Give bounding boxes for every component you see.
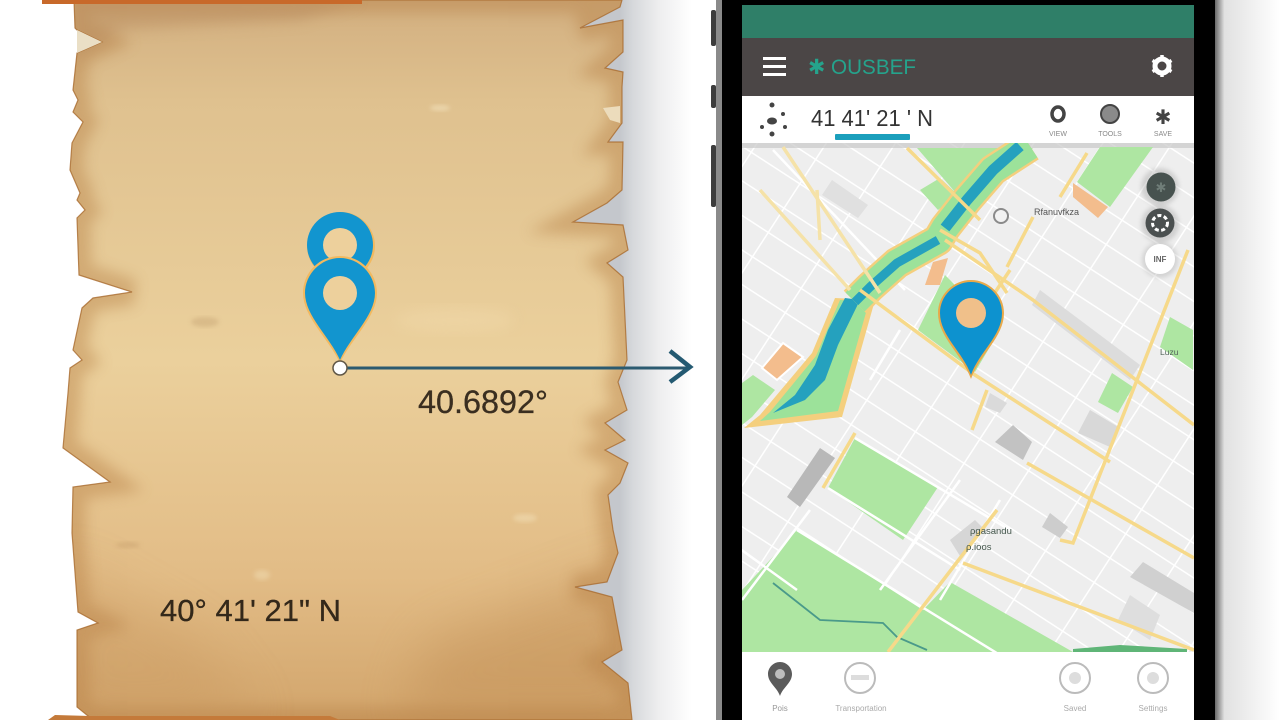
map: river with banks: [744, 146, 1030, 428]
nav item: settings: [1138, 663, 1168, 713]
right side shadow: [1222, 0, 1280, 720]
screen: app header: [742, 38, 1194, 96]
map: grey building blocks: [787, 180, 1194, 640]
map: yellow roads: [760, 147, 1194, 652]
map: place label centre: ρgasandu: [970, 526, 1012, 537]
map: white street overlay: [742, 150, 1010, 652]
coordinate label: decimal: 40.6892°: [418, 384, 548, 420]
panel: smartphone: [700, 0, 1224, 720]
icon: rear location pin: [307, 212, 375, 280]
nav item: location: [768, 662, 792, 713]
map control: info button: INF: [1154, 255, 1167, 264]
map: orange plots: [762, 183, 1108, 380]
icon: ring tool: VIEW: [1049, 131, 1067, 138]
icon: compass cluster: [760, 102, 787, 136]
nav item: saved: Saved: [1064, 704, 1086, 713]
active tab underline: [835, 134, 910, 140]
left tear patch: [77, 30, 102, 53]
screen: bottom navigation: [742, 652, 1194, 720]
icon: star tool: [1154, 107, 1172, 138]
map: place label centre second line: ρ.ioos: [966, 542, 992, 553]
coordinate label: DMS: 40° 41' 21" N: [160, 593, 341, 628]
arrow: parchment to phone: [333, 351, 690, 382]
app logo: ✱ OUSBEF: [808, 56, 916, 79]
icon: settings gear: [1152, 55, 1172, 77]
icon: disc tool: TOOLS: [1098, 131, 1122, 138]
map control: layers button: ✱: [1156, 180, 1167, 195]
map control: layers button: [1141, 168, 1179, 206]
map: dark green strip: [1073, 645, 1187, 652]
river upper channel: [855, 146, 1030, 302]
map: place label east: Luzu: [1160, 347, 1179, 357]
nav item: routes: Transportation: [835, 704, 887, 713]
nav item: location: Pois: [772, 704, 788, 713]
icon: disc tool: [1098, 105, 1122, 138]
map: place label north: Rfanuvfkza: [1034, 207, 1079, 217]
coordinates readout: 41 41' 21 ' N: [811, 105, 933, 131]
phone side buttons: [711, 10, 716, 207]
icon: map location pin: [938, 280, 1004, 379]
map: parks: [742, 147, 1193, 652]
icon: front location pin: [303, 256, 377, 363]
screen: status bar: [742, 5, 1194, 38]
map control: recentre button: [1141, 205, 1179, 243]
phone body: [716, 0, 1224, 720]
chart: street map: [742, 143, 1194, 652]
nav item: routes: [835, 663, 887, 713]
map: stream: [773, 583, 927, 650]
icon: star tool: ✱: [1155, 107, 1171, 129]
parchment sheet: [60, 0, 640, 720]
panel: torn parchment: [42, 0, 640, 720]
top torn strip: [42, 0, 362, 4]
icon: map landmark ring: [994, 209, 1008, 223]
icon: ring tool: [1049, 107, 1067, 138]
nav item: saved: [1060, 663, 1090, 713]
background shadow behind parchment: [560, 0, 692, 720]
icon: star tool: SAVE: [1154, 131, 1172, 138]
nav item: settings: Settings: [1139, 704, 1167, 713]
bottom torn strip: [48, 715, 340, 720]
icon: hamburger menu: [763, 57, 786, 76]
screen: coordinates toolbar: [742, 96, 1194, 143]
river lower lobe: [744, 298, 875, 428]
map control: info button: [1142, 242, 1178, 278]
right tear patch: [603, 106, 620, 123]
